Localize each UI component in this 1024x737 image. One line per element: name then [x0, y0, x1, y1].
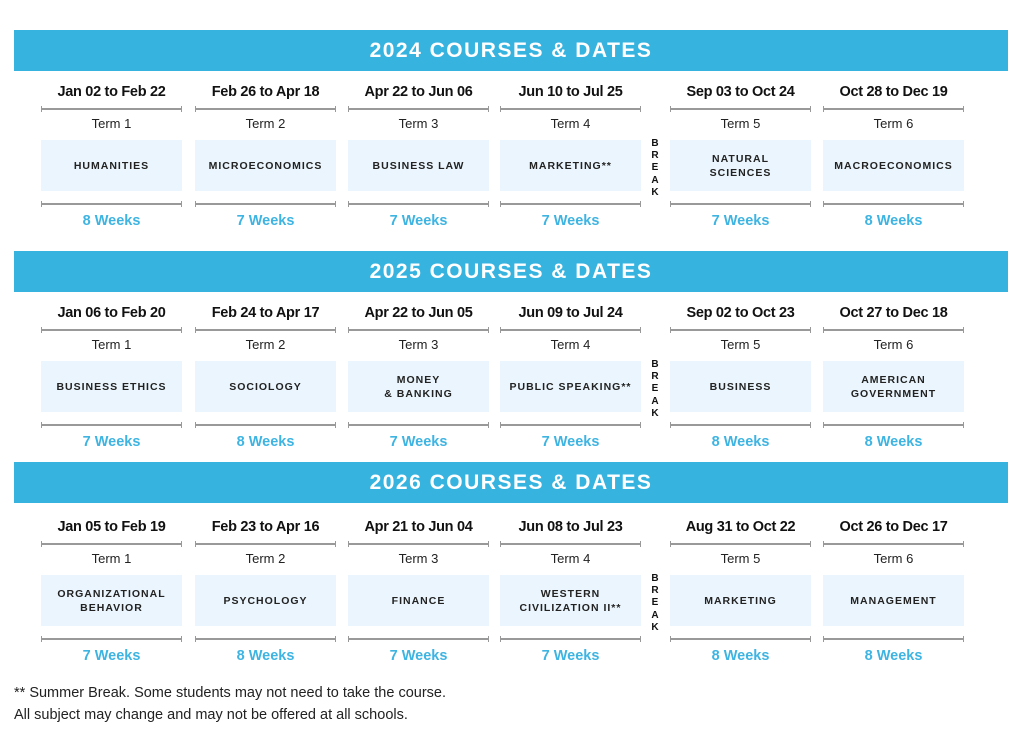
term 1 2024: HUMANITIES	[74, 160, 149, 172]
term 2 2026: Term 2	[246, 551, 285, 566]
term 2 2026: PSYCHOLOGY	[223, 594, 308, 606]
term 1 2024	[41, 84, 182, 229]
term 4 2024	[500, 84, 641, 229]
term 4 2024: MARKETING**	[529, 160, 612, 172]
term 5 2026: Aug 31 to Oct 22	[686, 519, 795, 535]
term 3 2024: Apr 22 to Jun 06	[364, 84, 472, 100]
banner: 2025: 2025 COURSES & DATES	[370, 260, 652, 283]
term 2 2024: MICROECONOMICS	[209, 160, 322, 172]
term 4 2024: Jun 10 to Jul 25	[518, 84, 622, 100]
term 4 2024: 7 Weeks	[542, 213, 599, 229]
term 4 2025: Jun 09 to Jul 24	[518, 305, 622, 321]
term 1 2025	[41, 305, 182, 450]
term 5 2025: Term 5	[721, 337, 760, 352]
break label	[651, 573, 659, 633]
footnote 2: All subject may change and may not be offered at all schools.	[14, 707, 408, 723]
break label: K	[651, 622, 659, 633]
banner: 2024: 2024 COURSES & DATES	[370, 39, 652, 62]
break label: E	[652, 383, 658, 394]
break label: B	[651, 359, 659, 370]
term 1 2024: Jan 02 to Feb 22	[57, 84, 166, 100]
term 3 2025: Term 3	[399, 337, 438, 352]
term 1 2025: Term 1	[92, 337, 131, 352]
term 2 2025: SOCIOLOGY	[229, 380, 302, 392]
term 5 2025: Sep 02 to Oct 23	[686, 305, 795, 321]
section: 2026	[14, 462, 1008, 664]
term 3 2026: FINANCE	[392, 594, 445, 606]
term 5 2024: SCIENCES	[710, 166, 771, 178]
term 5 2026: Term 5	[721, 551, 760, 566]
term 1 2026	[41, 519, 182, 664]
term 5 2024: Term 5	[721, 116, 760, 131]
term 5 2024	[670, 84, 811, 229]
term 5 2025	[670, 305, 811, 450]
term 2 2026: 8 Weeks	[237, 648, 294, 664]
term 1 2025: 7 Weeks	[83, 434, 140, 450]
break label: B	[651, 573, 659, 584]
term 6 2024: 8 Weeks	[865, 213, 922, 229]
term 5 2025: 8 Weeks	[712, 434, 769, 450]
term 4 2026: CIVILIZATION II**	[520, 602, 621, 614]
term 5 2024: 7 Weeks	[712, 213, 769, 229]
banner: 2026: 2026 COURSES & DATES	[370, 471, 652, 494]
term 3 2026	[348, 519, 489, 664]
break label: K	[651, 408, 659, 419]
break label	[651, 359, 659, 419]
term 3 2025: 7 Weeks	[390, 434, 447, 450]
term 4 2025: 7 Weeks	[542, 434, 599, 450]
term 6 2025: Term 6	[874, 337, 913, 352]
term 3 2025: Apr 22 to Jun 05	[364, 305, 472, 321]
section: 2024	[14, 30, 1008, 229]
term 3 2025: & BANKING	[384, 388, 453, 400]
term 2 2024: 7 Weeks	[237, 213, 294, 229]
term 4 2026: WESTERN	[541, 588, 600, 600]
term 3 2024	[348, 84, 489, 229]
term 6 2026: 8 Weeks	[865, 648, 922, 664]
term 5 2024: Sep 03 to Oct 24	[686, 84, 795, 100]
term 1 2026: ORGANIZATIONAL	[57, 588, 166, 600]
break label: R	[651, 150, 659, 161]
break label: E	[652, 597, 658, 608]
term 4 2024: Term 4	[551, 116, 590, 131]
term 1 2025: BUSINESS ETHICS	[56, 380, 167, 392]
term 6 2025: AMERICAN	[861, 374, 926, 386]
term 6 2026	[823, 519, 964, 664]
footnote 1: ** Summer Break. Some students may not need to take the course.	[14, 685, 446, 701]
term 4 2025	[500, 305, 641, 450]
term 2 2025: Term 2	[246, 337, 285, 352]
term 5 2026: MARKETING	[704, 594, 777, 606]
term 3 2024: BUSINESS LAW	[373, 160, 464, 172]
term 5 2026	[670, 519, 811, 664]
term 6 2026: Term 6	[874, 551, 913, 566]
term 1 2026: BEHAVIOR	[80, 602, 143, 614]
break label: R	[651, 585, 659, 596]
banner: 2026	[14, 462, 1008, 503]
term 1 2026: 7 Weeks	[83, 648, 140, 664]
term 3 2026: Term 3	[399, 551, 438, 566]
term 2 2024: Feb 26 to Apr 18	[212, 84, 319, 100]
banner: 2024	[14, 30, 1008, 71]
break label: E	[652, 162, 658, 173]
term 2 2025: Feb 24 to Apr 17	[212, 305, 319, 321]
term 6 2025: Oct 27 to Dec 18	[839, 305, 948, 321]
break label: R	[651, 371, 659, 382]
term 1 2025: Jan 06 to Feb 20	[57, 305, 166, 321]
banner: 2025	[14, 251, 1008, 292]
term 1 2026: Jan 05 to Feb 19	[57, 519, 166, 535]
break label: K	[651, 187, 659, 198]
term 1 2024: 8 Weeks	[83, 213, 140, 229]
term 5 2025: BUSINESS	[710, 380, 771, 392]
term 6 2025: 8 Weeks	[865, 434, 922, 450]
term 5 2024: NATURAL	[712, 152, 769, 164]
term 2 2026: Feb 23 to Apr 16	[212, 519, 319, 535]
term 3 2024: Term 3	[399, 116, 438, 131]
term 6 2024: Oct 28 to Dec 19	[839, 84, 948, 100]
term 3 2025	[348, 305, 489, 450]
break label: A	[651, 396, 659, 407]
term 6 2024: MACROECONOMICS	[834, 160, 953, 172]
term 3 2026: Apr 21 to Jun 04	[364, 519, 472, 535]
term 2 2025	[195, 305, 336, 450]
term 4 2026: 7 Weeks	[542, 648, 599, 664]
term 2 2024	[195, 84, 336, 229]
term 6 2025	[823, 305, 964, 450]
term 4 2026: Jun 08 to Jul 23	[518, 519, 622, 535]
term 6 2026: MANAGEMENT	[850, 594, 937, 606]
term 6 2024: Term 6	[874, 116, 913, 131]
term 5 2026: 8 Weeks	[712, 648, 769, 664]
term 6 2026: Oct 26 to Dec 17	[839, 519, 948, 535]
term 2 2025: 8 Weeks	[237, 434, 294, 450]
term 6 2024	[823, 84, 964, 229]
term 1 2024: Term 1	[92, 116, 131, 131]
break label: A	[651, 610, 659, 621]
term 3 2026: 7 Weeks	[390, 648, 447, 664]
term 4 2026	[500, 519, 641, 664]
term 4 2025: PUBLIC SPEAKING**	[509, 380, 632, 392]
break label	[651, 138, 659, 198]
break label: B	[651, 138, 659, 149]
term 6 2025: GOVERNMENT	[851, 388, 936, 400]
term 2 2026	[195, 519, 336, 664]
term 3 2024: 7 Weeks	[390, 213, 447, 229]
term 1 2026: Term 1	[92, 551, 131, 566]
term 3 2025: MONEY	[397, 374, 440, 386]
break label: A	[651, 175, 659, 186]
section: 2025	[14, 251, 1008, 450]
term 4 2026: Term 4	[551, 551, 590, 566]
term 4 2025: Term 4	[551, 337, 590, 352]
term 2 2024: Term 2	[246, 116, 285, 131]
